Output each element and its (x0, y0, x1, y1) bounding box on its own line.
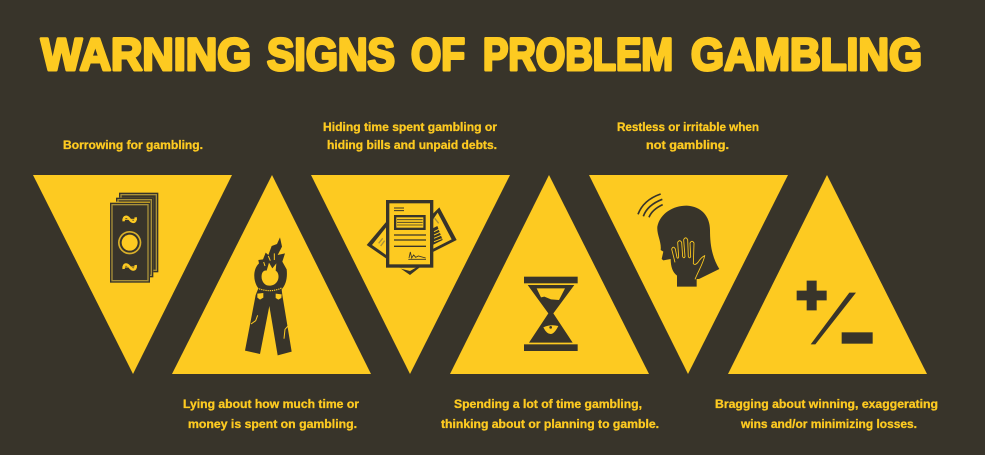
text: restless caption (617, 120, 759, 152)
triangle: spending (450, 175, 649, 374)
text: lying caption: Lying about how much time or (183, 397, 359, 411)
panel: restless (589, 120, 788, 374)
icon: hourglass (524, 277, 578, 351)
icon: head with hand (638, 194, 719, 287)
icon: plus slash minus (797, 281, 873, 344)
text: spending caption: Spending a lot of time gambling, (454, 397, 642, 411)
panel: lying (172, 175, 371, 431)
title: OF (411, 29, 465, 80)
title: GAMBLING (691, 29, 922, 80)
triangle: borrowing (33, 175, 232, 374)
icon: burning jeans (245, 237, 292, 355)
text: spending caption: thinking about or planning to gamble. (441, 417, 659, 431)
panel: borrowing (33, 138, 232, 374)
text: hiding caption: hiding bills and unpaid debts. (327, 138, 497, 152)
triangle: restless (589, 175, 788, 374)
text: spending caption (441, 397, 659, 431)
triangle: lying (172, 175, 371, 374)
panel: hiding (311, 120, 510, 374)
title (41, 29, 922, 80)
title: WARNING (41, 29, 251, 80)
text: hiding caption (323, 120, 497, 152)
panel: bragging (715, 175, 938, 431)
text: hiding caption: Hiding time spent gambling or (323, 120, 497, 134)
text: restless caption: Restless or irritable when (617, 120, 759, 134)
text: lying caption: money is spent on gambling. (188, 417, 357, 431)
text: borrowing caption: Borrowing for gambling. (63, 138, 203, 152)
triangle: bragging (728, 175, 927, 374)
triangle: hiding (311, 175, 510, 374)
text: bragging caption: Bragging about winning, exaggerating (715, 397, 938, 411)
title: SIGNS (267, 29, 395, 80)
icon: stack of money (109, 193, 158, 284)
panel: spending (441, 175, 659, 431)
title: PROBLEM (483, 29, 673, 80)
icon: documents (367, 200, 457, 275)
text: restless caption: not gambling. (646, 138, 729, 152)
text: bragging caption (715, 397, 938, 431)
text: bragging caption: wins and/or minimizing losses. (740, 417, 917, 431)
text: lying caption (183, 397, 359, 431)
